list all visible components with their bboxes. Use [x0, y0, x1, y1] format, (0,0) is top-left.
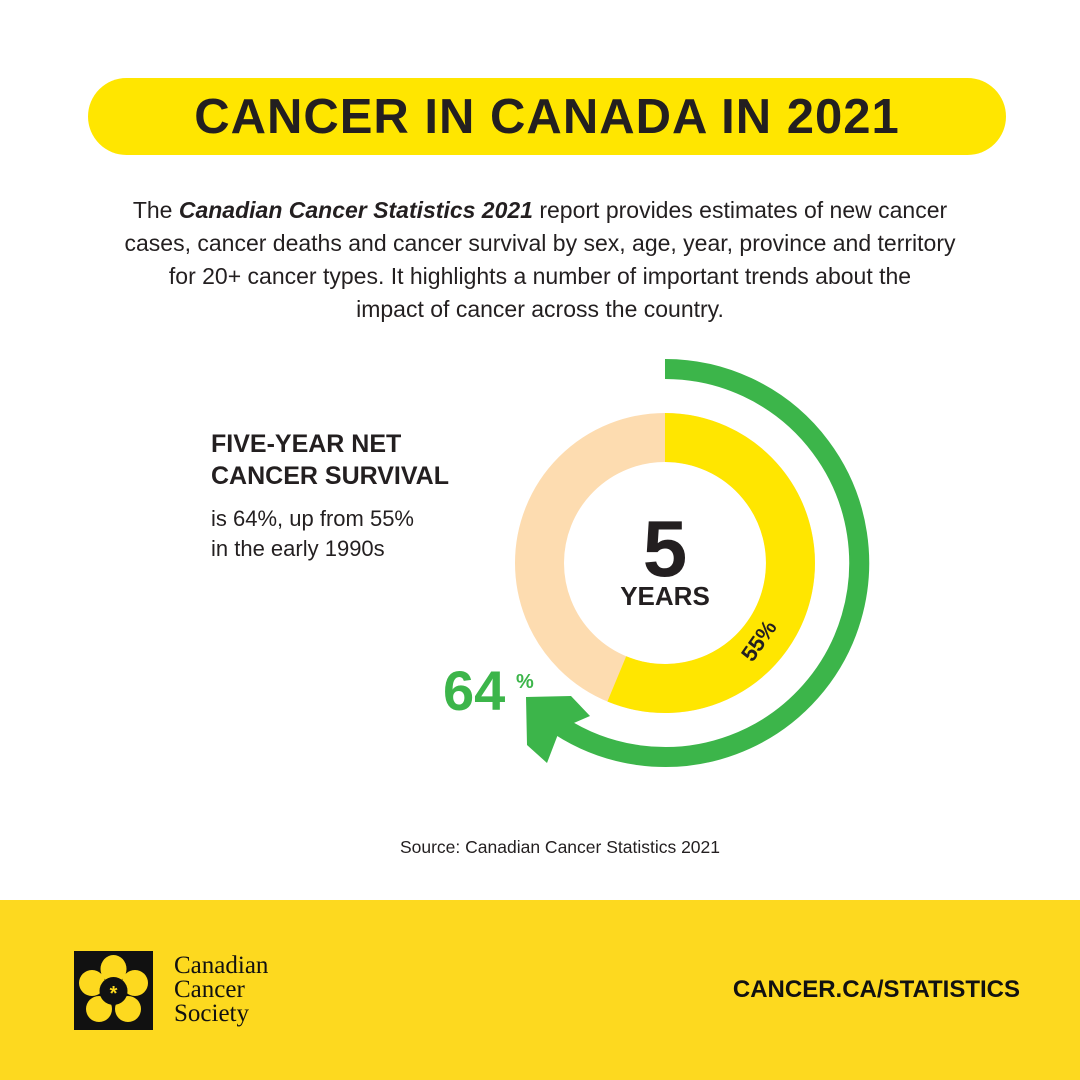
intro text	[124, 197, 956, 322]
stat description: in the early 1990s	[211, 536, 385, 561]
footer	[0, 900, 1080, 1080]
icon: daffodil	[74, 951, 153, 1030]
intro text: for 20+ cancer types. It highlights a number of important trends about the	[169, 263, 911, 289]
donut: background ring	[540, 438, 790, 688]
green arrow arc	[526, 369, 859, 763]
icon: daffodil: *	[110, 983, 118, 1005]
center label 5 years: 5	[643, 504, 687, 593]
intro text: cases, cancer deaths and cancer survival by sex, age, year, province and territory	[124, 230, 955, 256]
title banner: CANCER IN CANADA IN 2021	[194, 90, 900, 144]
center label 5 years: YEARS	[620, 581, 710, 611]
source: Source: Canadian Cancer Statistics 2021	[400, 837, 720, 857]
logo text: Society	[174, 1000, 249, 1027]
intro text: impact of cancer across the country.	[356, 296, 724, 322]
intro text: The Canadian Cancer Statistics 2021 report provides estimates of new cancer	[133, 197, 947, 223]
64% label: 64	[443, 659, 505, 722]
stat heading	[211, 430, 449, 490]
title banner	[88, 78, 1006, 155]
64% label	[443, 659, 534, 722]
logo text	[174, 952, 268, 1027]
logo text: Canadian	[174, 952, 268, 979]
center label 5 years	[620, 504, 710, 611]
website: CANCER.CA/STATISTICS	[733, 976, 1020, 1003]
stat heading: CANCER SURVIVAL	[211, 462, 449, 490]
logo text: Cancer	[174, 976, 245, 1003]
logo	[74, 951, 268, 1030]
stat heading: FIVE-YEAR NET	[211, 430, 401, 458]
stat description	[211, 506, 414, 561]
55% label: 55%	[736, 615, 782, 666]
64% label: %	[516, 671, 534, 693]
stat description: is 64%, up from 55%	[211, 506, 414, 531]
donut: 55% segment	[617, 438, 790, 688]
